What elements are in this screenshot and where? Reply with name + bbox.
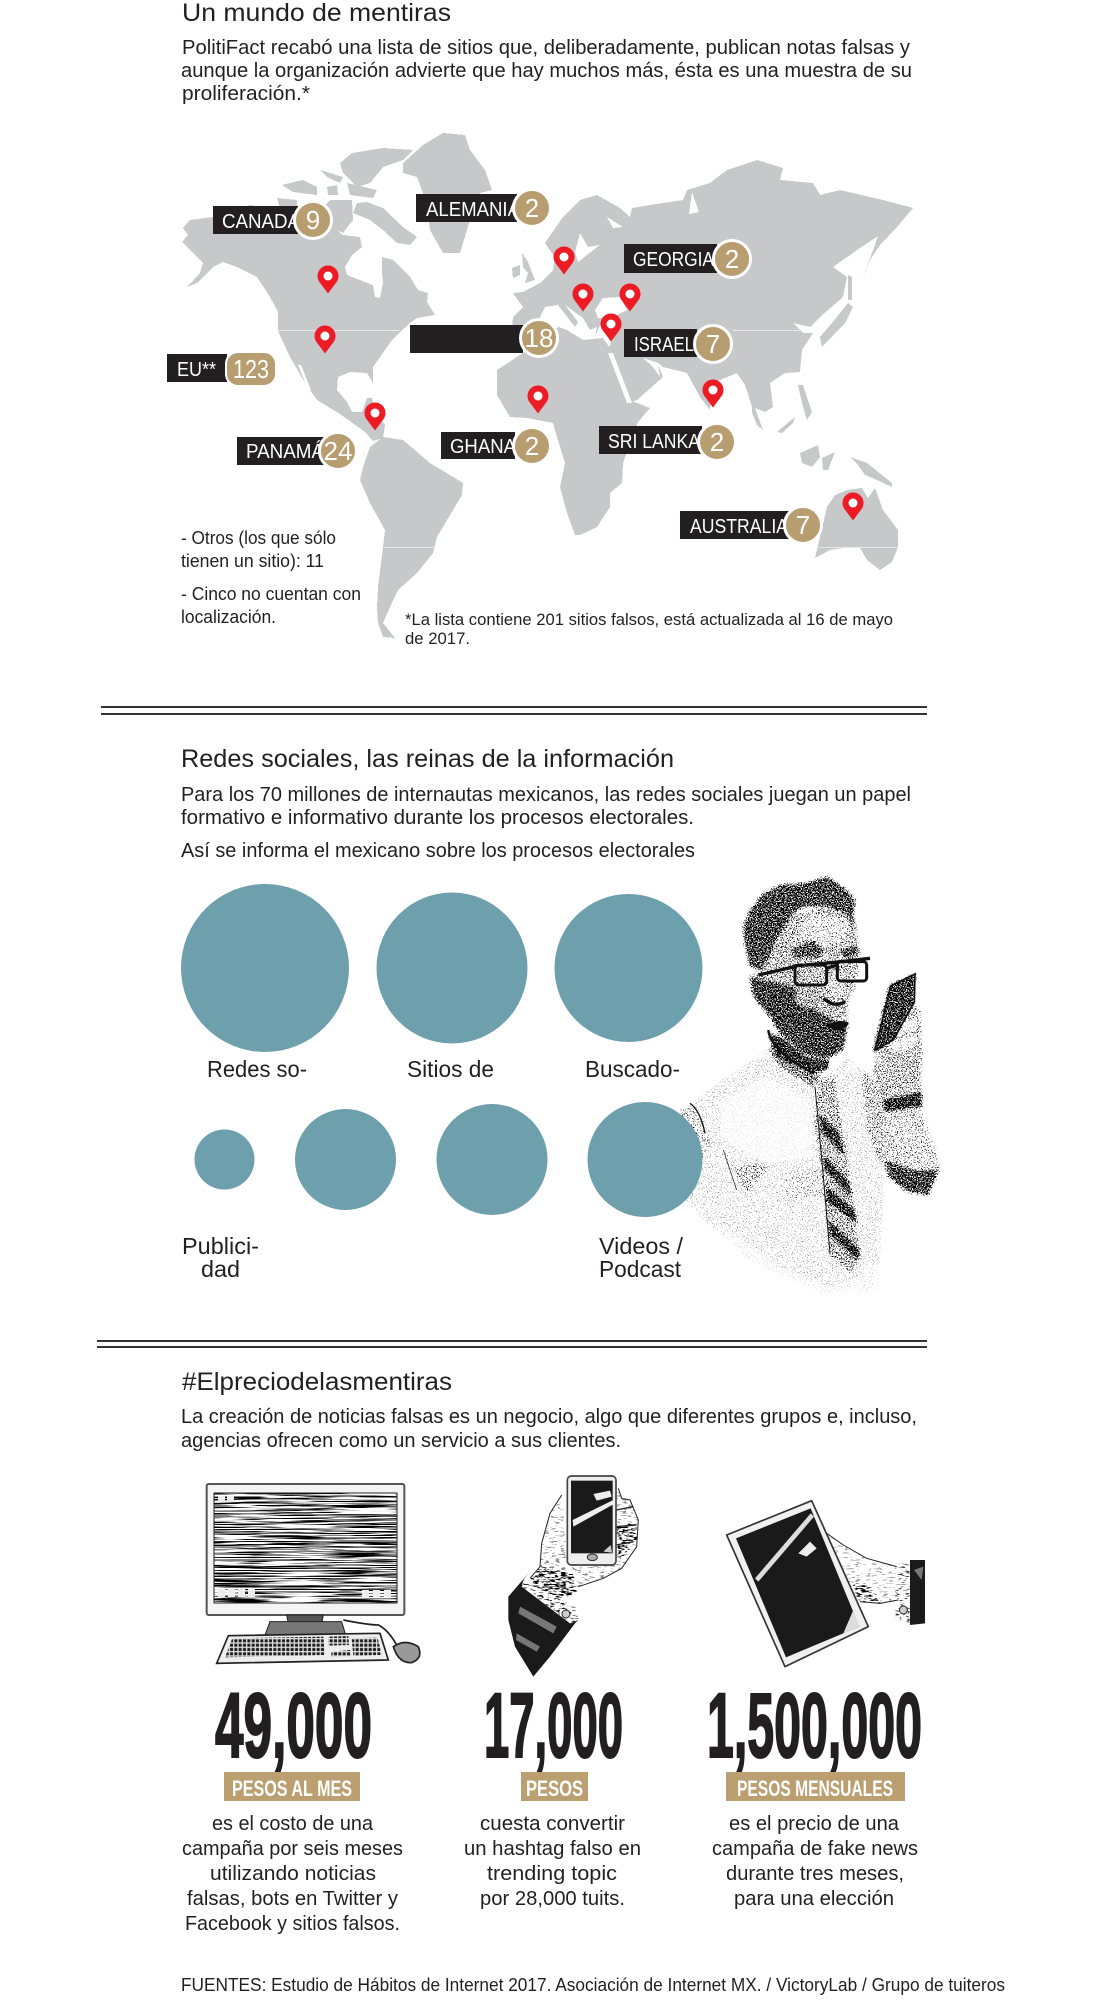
stat: 1,500,000: campaña de fake news [712,1837,918,1860]
stat: 1,500,000: PESOS MENSUALES [737,1776,893,1801]
bubble chart [181,884,702,1217]
bubble labels [182,1056,684,1282]
stat: 49,000: campaña por seis meses [182,1837,403,1860]
heading: el precio de las mentiras: #Elpreciodelasmentiras [182,1368,452,1396]
label: Israel 7: 7 [706,329,720,359]
stat: 49,000: Facebook y sitios falsos. [185,1912,400,1935]
stat: 49,000: utilizando noticias [210,1862,376,1885]
intro text: Para los 70 millones de internautas mexicanos, las redes sociales juegan un papel [181,783,911,806]
label: Ghana 2: GHANA [450,436,517,458]
stat: 49,000: 49,000 [215,1675,372,1777]
stat: 17,000: un hashtag falso en [464,1837,641,1860]
bubble labels: Buscado- [585,1056,680,1082]
label: Alemania 2 [416,190,550,226]
label: Panamá 24 [237,432,356,470]
location pins [314,246,864,520]
bubble labels: Publici- [182,1233,259,1259]
label: 18 with blank bar [410,320,558,356]
world map [182,133,913,638]
label: Sri Lanka 2: SRI LANKA [608,431,701,453]
stat: 17,000: 17,000 [484,1675,623,1777]
stat: 1,500,000: durante tres meses, [726,1862,904,1885]
intro text: PolitiFact recabó una lista de sitios que, deliberadamente, publican notas falsas y [182,36,911,59]
heading: redes sociales: Redes sociales, las reinas de la información [181,745,674,773]
stat: 1,500,000: para una elección [734,1887,894,1910]
label: 18 with blank bar: 18 [525,323,553,353]
intro text: Así se informa el mexicano sobre los procesos electorales [181,839,695,862]
intro text [181,36,912,105]
intro text [181,1405,917,1452]
stat: 17,000: por 28,000 tuits. [480,1887,625,1910]
notes: otros and sin localización: - Cinco no cuentan con [181,584,361,604]
bubble labels: Redes so- [207,1056,307,1082]
label: Georgia 2 [624,240,750,278]
label: Australia 7: 7 [796,510,810,540]
footnote [405,610,893,648]
bubble labels: dad [201,1256,240,1282]
stat: 49,000: PESOS AL MES [232,1776,352,1801]
label: Israel 7 [624,326,732,362]
intro text: La creación de noticias falsas es un negocio, algo que diferentes grupos e, incluso, [181,1405,917,1428]
stat: 1,500,000: es el precio de una [729,1812,900,1835]
stat: 49,000 [182,1675,403,1935]
illustration: man with phone [680,870,950,1320]
panel: el precio de las mentiras [181,1368,1005,1995]
notes: otros and sin localización: localización. [181,607,276,627]
illustration: computer [207,1484,420,1663]
label: Canada 9 [213,202,332,238]
label: Georgia 2: GEORGIA [633,249,715,271]
label: Panamá 24: PANAMÁ [246,440,325,463]
label: Canada 9: 9 [306,205,320,235]
intro text [181,783,911,862]
stat: 49,000: falsas, bots en Twitter y [187,1887,399,1910]
stat: 1,500,000 [707,1675,922,1910]
sources: FUENTES: Estudio de Hábitos de Internet 2017. Asociación de Internet MX. / VictoryLab / Grupo de tuiteros [181,1975,1005,1995]
label: Australia 7 [680,506,822,544]
notes: otros and sin localización: tienen un sitio): 11 [181,551,324,571]
man: glasses and details [690,958,915,1253]
panel: un mundo de mentiras [167,0,913,648]
label: EU 123: EU** [177,359,216,381]
notes: otros and sin localización: - Otros (los que sólo [181,528,336,548]
stat: 17,000 [464,1675,641,1910]
label: EU 123: 123 [233,354,269,384]
illustration: hand with phone [490,1470,940,1690]
stat: 49,000: es el costo de una [212,1812,374,1835]
panel: redes sociales [181,745,950,1320]
stat: 17,000: trending topic [487,1862,617,1885]
label: EU 123 [167,352,276,386]
bubble labels: Sitios de [407,1056,494,1082]
stat: 17,000: cuesta convertir [480,1812,625,1835]
label: Alemania 2: 2 [525,193,539,223]
intro text: proliferación.* [182,82,310,105]
label: Sri Lanka 2 [599,424,736,460]
footnote: de 2017. [405,629,470,648]
notes: otros and sin localización [181,528,361,627]
label: Ghana 2 [441,428,550,464]
intro text: formativo e informativo durante los procesos electorales. [181,806,694,829]
bubble labels: Podcast [599,1256,682,1282]
footnote: *La lista contiene 201 sitios falsos, está actualizada al 16 de mayo [405,610,893,629]
label: Canada 9: CANADA [222,211,301,233]
label: Israel 7: ISRAEL [634,334,694,356]
intro text: agencias ofrecen como un servicio a sus clientes. [181,1429,621,1452]
illustration: hand with tablet [727,1501,925,1667]
label: Sri Lanka 2: 2 [710,427,724,457]
intro text: aunque la organización advierte que hay muchos más, ésta es una muestra de su [181,59,912,82]
label: Panamá 24: 24 [324,436,352,466]
label: Georgia 2: 2 [725,244,739,274]
bubble labels: Videos / [599,1233,684,1259]
stat: 17,000: PESOS [526,1776,583,1801]
label: Alemania 2: ALEMANIA [426,199,521,221]
label: Australia 7: AUSTRALIA [690,516,789,538]
label: Ghana 2: 2 [525,431,539,461]
